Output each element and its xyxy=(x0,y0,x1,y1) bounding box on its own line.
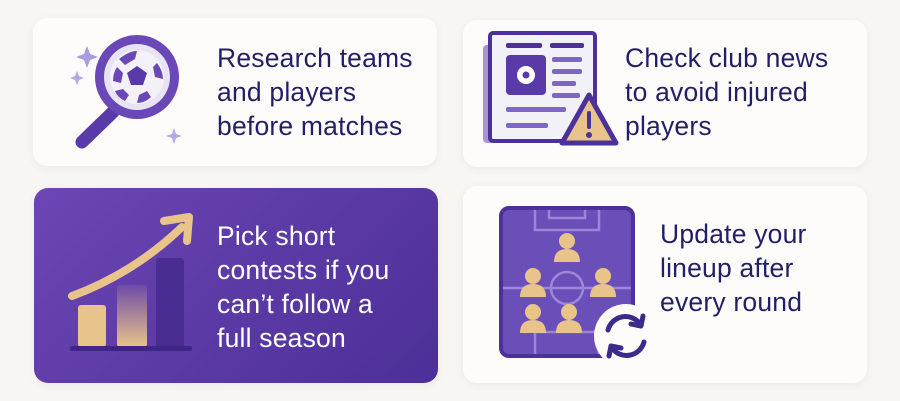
text: club news: Check club news xyxy=(625,43,828,73)
text: lineup xyxy=(660,219,807,317)
text: short contests: Pick short xyxy=(217,221,335,251)
text: short contests: can’t follow a xyxy=(217,289,373,319)
text: research xyxy=(217,43,413,141)
text: club news: to avoid injured xyxy=(625,77,808,107)
icon: magnifier with ball xyxy=(70,35,182,148)
text: club news xyxy=(625,43,828,141)
text: lineup: lineup after xyxy=(660,253,794,283)
text: lineup: Update your xyxy=(660,219,807,249)
icon: bar chart with arrow xyxy=(68,213,193,351)
text: lineup: every round xyxy=(660,287,802,317)
text: research: Research teams xyxy=(217,43,413,73)
text: research: before matches xyxy=(217,111,402,141)
icon: newspaper warning xyxy=(483,31,618,146)
text: research: and players xyxy=(217,77,356,107)
text: club news: players xyxy=(625,111,712,141)
text: short contests xyxy=(217,221,389,353)
text: short contests: contests if you xyxy=(217,255,389,285)
panel: research xyxy=(33,18,437,166)
panel: club news xyxy=(463,20,867,167)
panel: short contests xyxy=(34,188,438,383)
text: short contests: full season xyxy=(217,323,346,353)
panel: lineup xyxy=(463,186,867,383)
icon: pitch with players and refresh xyxy=(499,206,646,358)
